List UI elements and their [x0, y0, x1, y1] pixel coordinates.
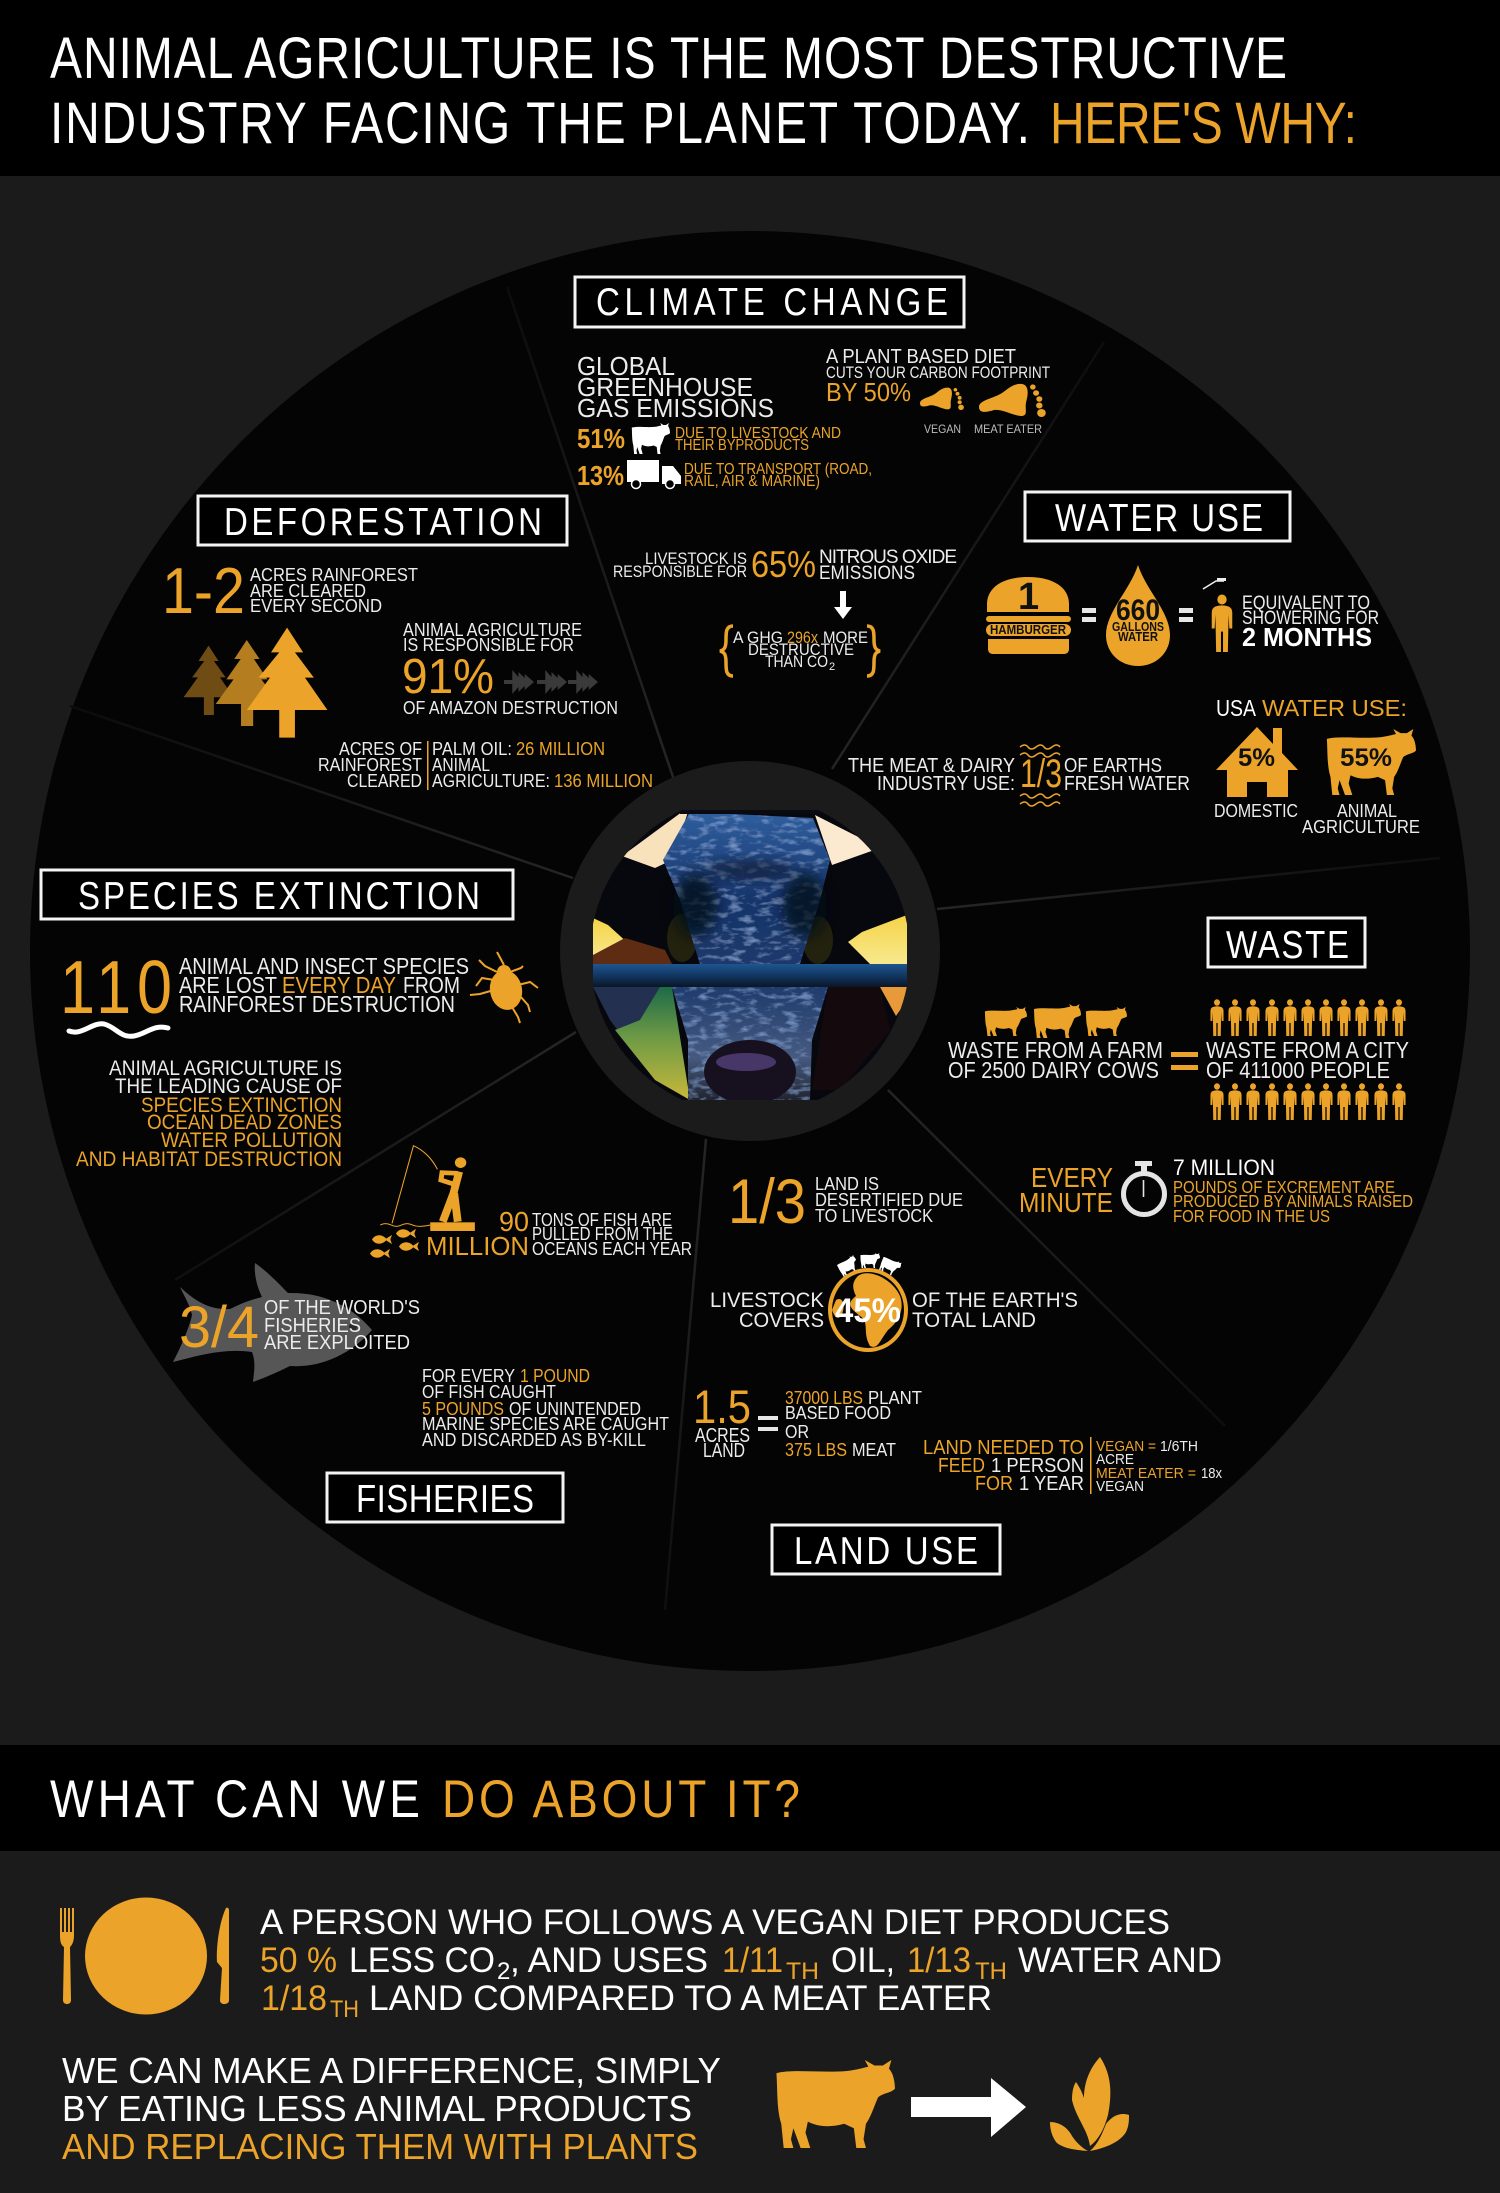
- stat: 90 million tons: MILLION: [426, 1231, 529, 1261]
- title: HERE'S WHY:: [1050, 92, 1357, 156]
- main wheel: [30, 231, 1470, 1671]
- heading: fisheries: [327, 1473, 563, 1522]
- text: vegan diet comparison: 2: [497, 1958, 510, 1985]
- stat: 1.5 acres equals: ACRES: [695, 1425, 750, 1447]
- stat: 65 percent nitrous oxide: 65%: [751, 544, 816, 585]
- stat: 1-2 acres: EVERY SECOND: [250, 595, 382, 616]
- text: by-kill: 1 POUND: [520, 1365, 590, 1386]
- stat: 1.5 acres equals: LAND: [703, 1440, 745, 1462]
- stat: 1.5 acres equals: [693, 1380, 922, 1462]
- stat: three quarters fisheries: FISHERIES: [264, 1314, 361, 1337]
- text: waste from a farm: WASTE FROM A FARM: [948, 1037, 1163, 1063]
- text: leading cause: THE LEADING CAUSE OF: [115, 1074, 342, 1098]
- callout: ghg 296x: DESTRUCTIVE: [748, 640, 854, 659]
- text: leading cause: OCEAN DEAD ZONES: [147, 1110, 342, 1134]
- stat: one third desertified: 1/3: [728, 1167, 806, 1237]
- text: plant based diet: BY 50%: [826, 377, 911, 407]
- text: equivalent to showering: 2 MONTHS: [1242, 622, 1372, 652]
- text: land needed to feed one person: FOR: [975, 1473, 1013, 1495]
- panel: species extinction: [41, 870, 538, 1171]
- band: what can we do: DO ABOUT IT?: [442, 1770, 800, 1829]
- text: by-kill: OF UNINTENDED: [509, 1398, 641, 1419]
- stat: 91 percent amazon: ANIMAL AGRICULTURE: [403, 620, 582, 640]
- text: vegan diet comparison: 1/11: [722, 1941, 783, 1980]
- stat: 65 percent nitrous oxide: [613, 544, 957, 585]
- text: by-kill: [422, 1365, 669, 1450]
- stat: 91 percent amazon: [402, 620, 618, 718]
- text: waste from a farm: [948, 1037, 1163, 1083]
- text: plant based diet: A PLANT BASED DIET: [826, 346, 1016, 368]
- icon: hamburger: [986, 576, 1071, 654]
- stat: one third fresh water: THE MEAT & DAIRY: [848, 755, 1015, 777]
- stat: 51 percent livestock: [577, 423, 841, 454]
- centre ring and cow photo: [560, 761, 940, 1141]
- icon: meat eater footprint: [974, 384, 1046, 436]
- stat: 65 percent nitrous oxide: EMISSIONS: [819, 563, 915, 584]
- stat: 1-2 acres: 1-2: [162, 554, 245, 627]
- text: acres of rainforest cleared: AGRICULTURE:: [432, 771, 550, 791]
- text: leading cause: [76, 1056, 342, 1171]
- text: make a difference: [62, 2050, 721, 2167]
- text: acres of rainforest cleared: 136 MILLION: [554, 771, 653, 791]
- stat: 51 percent livestock: THEIR BYPRODUCTS: [675, 437, 809, 454]
- title: INDUSTRY FACING THE PLANET TODAY.: [50, 92, 1030, 156]
- text: make a difference: WE CAN MAKE A DIFFERENCE, SIMPLY: [62, 2050, 721, 2091]
- stat: three quarters fisheries: 3/4: [179, 1295, 259, 1360]
- text: vegan diet comparison: TH: [975, 1958, 1007, 1985]
- stat: 45 percent globe: COVERS: [739, 1309, 824, 1332]
- text: vegan diet comparison: 1/18: [261, 1979, 327, 2018]
- decoration: white wave: [69, 1024, 168, 1036]
- text: global greenhouse gas emissions: GLOBAL: [577, 351, 675, 381]
- text: waste from a farm: OF 2500 DAIRY COWS: [948, 1057, 1159, 1083]
- text: by-kill: MARINE SPECIES ARE CAUGHT: [422, 1413, 669, 1434]
- text: by-kill: AND DISCARDED AS BY-KILL: [422, 1429, 646, 1450]
- text: waste from a city: [1206, 1037, 1409, 1083]
- icon: vegan footprint: VEGAN: [924, 422, 961, 436]
- icon: grey fish: [173, 1263, 372, 1382]
- stat: 90 million tons: TONS OF FISH ARE: [532, 1210, 672, 1230]
- text: equivalent to showering: EQUIVALENT TO: [1242, 593, 1370, 614]
- icon: person in shower: [1203, 578, 1232, 652]
- stat: 65 percent nitrous oxide: NITROUS OXIDE: [819, 547, 957, 568]
- icon: cow: [776, 2060, 895, 2148]
- stat: 110 species: ARE LOST: [179, 972, 277, 998]
- stat: 110 species: [60, 945, 469, 1029]
- text: 7 million pounds: PRODUCED BY ANIMALS RAISED: [1173, 1191, 1413, 1211]
- stat: 90 million tons: PULLED FROM THE: [532, 1224, 673, 1244]
- stat: 45 percent globe: OF THE EARTH'S: [912, 1289, 1078, 1312]
- icon: hamburger: HAMBURGER: [990, 622, 1067, 637]
- text: waste from a city: OF 411000 PEOPLE: [1206, 1057, 1390, 1083]
- text: vegan diet comparison: [260, 1903, 1222, 2023]
- text: 7 million pounds: [1173, 1155, 1413, 1226]
- stat: 51 percent livestock: 51%: [577, 423, 625, 454]
- text: land needed to feed one person: ACRE: [1096, 1452, 1134, 1468]
- text: equivalent to showering: SHOWERING FOR: [1242, 608, 1379, 629]
- text: vegan diet comparison: TH: [786, 1958, 819, 1985]
- text: land needed to feed one person: 1 YEAR: [1019, 1473, 1084, 1495]
- icon: meat eater footprint: MEAT EATER: [974, 422, 1042, 436]
- stat: one third desertified: LAND IS: [815, 1173, 879, 1194]
- panel: water use: [848, 492, 1420, 837]
- text: usa water use: USA: [1216, 695, 1257, 721]
- stat: 110 species: FROM: [403, 972, 460, 998]
- stat: one third fresh water: FRESH WATER: [1064, 773, 1190, 795]
- callout: ghg 296x: [720, 626, 880, 676]
- heading: climate change: CLIMATE CHANGE: [596, 279, 948, 324]
- icon: house 5 percent: DOMESTIC: [1214, 801, 1298, 821]
- stat: 45 percent globe: 45%: [835, 1292, 901, 1330]
- icon: water drop 660 gallons: GALLONS: [1112, 619, 1164, 634]
- stat: 13 percent transport: 13%: [577, 460, 624, 491]
- stat: 110 species: EVERY DAY: [282, 972, 396, 998]
- heading: species extinction: SPECIES EXTINCTION: [78, 873, 480, 918]
- heading: fisheries: FISHERIES: [356, 1476, 534, 1521]
- icon: cow 55 percent: [1302, 729, 1420, 837]
- icon: trees: [184, 628, 327, 738]
- title: [50, 27, 1357, 156]
- text: vegan diet comparison: LESS CO: [349, 1941, 495, 1980]
- text: land needed to feed one person: VEGAN: [1096, 1479, 1144, 1495]
- text: land needed to feed one person: 18x: [1201, 1466, 1223, 1482]
- text: acres of rainforest cleared: CLEARED: [347, 771, 422, 791]
- stat: 1.5 acres equals: 37000 LBS: [785, 1388, 863, 1408]
- title: ANIMAL AGRICULTURE IS THE MOST DESTRUCTIVE: [50, 27, 1287, 91]
- stat: one third desertified: [728, 1167, 963, 1237]
- icon: cow 55 percent: 55%: [1340, 744, 1392, 772]
- text: global greenhouse gas emissions: [577, 351, 774, 423]
- text: acres of rainforest cleared: 26 MILLION: [516, 739, 605, 759]
- icon: hamburger: 1: [1018, 576, 1039, 618]
- stat: one third desertified: TO LIVESTOCK: [815, 1205, 934, 1226]
- text: land needed to feed one person: MEAT EATER =: [1096, 1466, 1196, 1482]
- icon: stopwatch: [1124, 1161, 1164, 1214]
- stat: 1-2 acres: ACRES RAINFOREST: [250, 564, 418, 585]
- stat: one third fresh water: 1/3: [1020, 752, 1062, 796]
- stat: 45 percent globe: [710, 1253, 1078, 1352]
- callout: ghg 296x: 2: [829, 661, 835, 673]
- stat: 65 percent nitrous oxide: LIVESTOCK IS: [645, 549, 747, 568]
- icon: plant: [1050, 2057, 1129, 2151]
- stat: one third fresh water: INDUSTRY USE:: [877, 773, 1015, 795]
- panel: waste: [948, 918, 1413, 1226]
- equals sign: [1179, 608, 1193, 622]
- text: leading cause: AND HABITAT DESTRUCTION: [76, 1147, 342, 1171]
- stat: 110 species: ANIMAL AND INSECT SPECIES: [179, 953, 469, 979]
- stat: 45 percent globe: TOTAL LAND: [912, 1309, 1036, 1332]
- icon: water drop 660 gallons: WATER: [1118, 629, 1159, 644]
- text: vegan diet comparison: , AND USES: [510, 1941, 708, 1980]
- equals sign: [1171, 1052, 1198, 1070]
- text: by-kill: 5 POUNDS: [422, 1398, 504, 1419]
- icon: three dairy cows: [985, 1004, 1127, 1038]
- callout: ghg 296x: A GHG: [733, 628, 783, 647]
- text: land needed to feed one person: [923, 1437, 1223, 1495]
- stat: one third fresh water: [848, 745, 1190, 806]
- stat: 1-2 acres: [162, 554, 418, 627]
- stat: 13 percent transport: RAIL, AIR & MARINE): [684, 473, 820, 490]
- stat: 1.5 acres equals: OR: [785, 1422, 809, 1442]
- stat: 1.5 acres equals: 1.5: [693, 1380, 751, 1433]
- panel: climate change: [575, 277, 1050, 676]
- callout: ghg 296x: THAN CO: [765, 652, 828, 671]
- stat: one third fresh water: OF EARTHS: [1064, 755, 1162, 777]
- text: 7 million pounds: 7 MILLION: [1173, 1155, 1275, 1180]
- heading: water use: WATER USE: [1055, 495, 1263, 540]
- stat: 13 percent transport: [577, 460, 872, 491]
- stat: three quarters fisheries: [179, 1295, 420, 1360]
- stat: 65 percent nitrous oxide: RESPONSIBLE FOR: [613, 562, 747, 581]
- text: every minute: [1019, 1162, 1113, 1218]
- text: every minute: EVERY: [1031, 1162, 1113, 1193]
- icon: bug: [470, 952, 538, 1023]
- heading: land use: LAND USE: [794, 1528, 978, 1573]
- stat: 91 percent amazon: IS RESPONSIBLE FOR: [403, 635, 574, 655]
- text: acres of rainforest cleared: ANIMAL: [432, 755, 490, 775]
- stat: 1.5 acres equals: PLANT: [868, 1388, 922, 1408]
- arrow: down: [834, 591, 852, 619]
- text: global greenhouse gas emissions: GREENHOUSE: [577, 372, 753, 402]
- text: land needed to feed one person: VEGAN =: [1096, 1439, 1156, 1455]
- stat: three quarters fisheries: ARE EXPLOITED: [264, 1331, 410, 1354]
- text: waste from a city: WASTE FROM A CITY: [1206, 1037, 1409, 1063]
- text: acres of rainforest cleared: PALM OIL:: [432, 739, 512, 759]
- text: leading cause: ANIMAL AGRICULTURE IS: [109, 1056, 342, 1080]
- stat: 51 percent livestock: DUE TO LIVESTOCK AND: [675, 425, 841, 442]
- text: vegan diet comparison: LAND COMPARED TO A MEAT EATER: [369, 1979, 992, 2018]
- text: acres of rainforest cleared: ACRES OF: [339, 739, 422, 759]
- text: acres of rainforest cleared: [318, 739, 653, 791]
- panel: land use: [693, 1167, 1223, 1574]
- stat: 1-2 acres: ARE CLEARED: [250, 580, 366, 601]
- text: acres of rainforest cleared: RAINFOREST: [318, 755, 422, 775]
- equals sign: [1082, 608, 1096, 622]
- text: 7 million pounds: POUNDS OF EXCREMENT ARE: [1173, 1177, 1395, 1197]
- band: what can we do: WHAT CAN WE: [50, 1770, 420, 1829]
- icon: house 5 percent: [1214, 727, 1298, 821]
- icon: plate and cutlery: [60, 1898, 229, 2014]
- text: vegan diet comparison: WATER AND: [1018, 1941, 1222, 1980]
- text: vegan diet comparison: TH: [330, 1996, 359, 2023]
- heading: waste: WASTE: [1226, 922, 1349, 967]
- panel: fisheries: [173, 1146, 692, 1522]
- stat: 91 percent amazon: 91%: [402, 650, 494, 704]
- stat: 90 million tons: OCEANS EACH YEAR: [532, 1239, 692, 1259]
- stat: 1.5 acres equals: 375 LBS: [785, 1440, 847, 1460]
- text: leading cause: WATER POLLUTION: [161, 1128, 342, 1152]
- icon: water drop 660 gallons: 660: [1116, 594, 1160, 627]
- icon: small fish: [370, 1229, 419, 1258]
- text: 7 million pounds: FOR FOOD IN THE US: [1173, 1206, 1330, 1226]
- text: plant based diet: CUTS YOUR CARBON FOOTPRINT: [826, 364, 1050, 382]
- icon: vegan footprint: [920, 388, 964, 436]
- text: vegan diet comparison: OIL,: [831, 1941, 895, 1980]
- text: by-kill: FOR EVERY: [422, 1365, 515, 1386]
- stat: one third desertified: DESERTIFIED DUE: [815, 1189, 963, 1210]
- text: every minute: MINUTE: [1019, 1187, 1113, 1218]
- text: make a difference: BY EATING LESS ANIMAL PRODUCTS: [62, 2088, 692, 2129]
- stat: 13 percent transport: DUE TO TRANSPORT (ROAD,: [684, 461, 872, 478]
- icon: cow 55 percent: ANIMAL: [1337, 801, 1397, 821]
- callout: ghg 296x: MORE: [823, 628, 868, 647]
- band: what can we do: [0, 1745, 1500, 1851]
- icon: water drop 660 gallons: [1106, 565, 1170, 666]
- panel: deforestation: [162, 496, 653, 791]
- text: land needed to feed one person: FEED: [938, 1455, 985, 1477]
- text: vegan diet comparison: 50 %: [260, 1941, 337, 1980]
- stat: 110 species: RAINFOREST DESTRUCTION: [179, 991, 455, 1017]
- text: vegan diet comparison: A PERSON WHO FOLLOWS A VEGAN DIET PRODUCES: [260, 1903, 1170, 1942]
- text: leading cause: SPECIES EXTINCTION: [141, 1093, 342, 1117]
- stat: 1.5 acres equals: BASED FOOD: [785, 1403, 891, 1423]
- stat: 91 percent amazon: OF AMAZON DESTRUCTION: [403, 698, 618, 718]
- icon: house 5 percent: 5%: [1238, 744, 1275, 772]
- stat: 1.5 acres equals: MEAT: [852, 1440, 896, 1460]
- stat: 45 percent globe: LIVESTOCK: [710, 1289, 824, 1312]
- stat: 110 species: 110: [60, 945, 172, 1029]
- header band: [0, 0, 1500, 176]
- text: equivalent to showering: [1242, 593, 1379, 652]
- icon: fisherman: [380, 1146, 475, 1231]
- callout: ghg 296x: 296x: [787, 628, 818, 647]
- text: vegan diet comparison: 1/13: [907, 1941, 971, 1980]
- stat: 90 million tons: 90: [499, 1206, 529, 1237]
- icon: cow 55 percent: AGRICULTURE: [1302, 817, 1420, 837]
- text: plant based diet: [826, 346, 1050, 407]
- text: make a difference: AND REPLACING THEM WITH PLANTS: [62, 2126, 698, 2167]
- text: by-kill: OF FISH CAUGHT: [422, 1381, 556, 1402]
- text: land needed to feed one person: 1/6TH: [1160, 1439, 1198, 1455]
- text: land needed to feed one person: LAND NEEDED TO: [923, 1437, 1084, 1459]
- heading: deforestation: DEFORESTATION: [224, 499, 542, 544]
- arrow: cow to plant: [911, 2078, 1026, 2137]
- stat: three quarters fisheries: OF THE WORLD'S: [264, 1296, 420, 1319]
- text: global greenhouse gas emissions: GAS EMISSIONS: [577, 393, 774, 423]
- text: land needed to feed one person: 1 PERSON: [991, 1455, 1084, 1477]
- stat: 90 million tons: [426, 1206, 692, 1261]
- text: usa water use: WATER USE:: [1262, 695, 1407, 721]
- icon: people rows: [1210, 999, 1406, 1120]
